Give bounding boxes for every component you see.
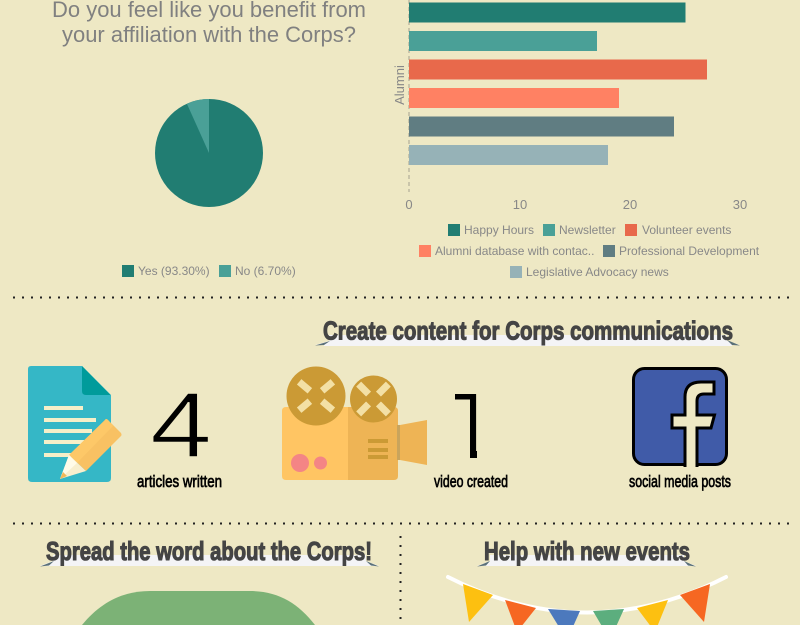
- y axis label: Alumni: [392, 65, 407, 105]
- bar legend: Legislative Advocacy news: [526, 265, 669, 279]
- bar legend: Happy Hours: [464, 223, 534, 237]
- bar legend: Volunteer events: [642, 223, 731, 237]
- green rounded shape: [82, 591, 315, 625]
- bar: Happy Hours: [409, 2, 686, 22]
- x axis ticks: 0: [405, 197, 413, 212]
- caption: video created: video created: [434, 472, 508, 491]
- heading: spread the word: Spread the word about the Corps!: [46, 536, 372, 566]
- pie legend: Yes (93.30%): [138, 264, 210, 278]
- bar legend: [419, 223, 760, 279]
- icon: film projector: [282, 366, 427, 480]
- x axis ticks: 20: [623, 197, 637, 212]
- bar: Newsletter: [409, 31, 597, 51]
- bar legend: Alumni database with contac..: [435, 244, 594, 258]
- heading: help with new events: Help with new events: [484, 536, 690, 566]
- x axis ticks: 10: [513, 197, 527, 212]
- pie legend: [122, 264, 296, 278]
- pie chart title: [52, 0, 366, 47]
- x axis ticks: [405, 197, 747, 212]
- bunting banner: [448, 577, 726, 625]
- pie legend: No (6.70%): [235, 264, 296, 278]
- pie chart: [155, 99, 263, 207]
- icon: document with pencil: [28, 366, 122, 482]
- number: 1: [455, 394, 477, 458]
- icon: facebook logo: [634, 368, 726, 467]
- pie chart title: your affiliation with the Corps?: [62, 22, 356, 47]
- number: 1: 1: [444, 374, 496, 478]
- x axis ticks: 30: [733, 197, 747, 212]
- bar: Alumni database: [409, 88, 619, 108]
- bar chart: [392, 0, 747, 212]
- caption: articles written: articles written: [137, 472, 222, 491]
- bar: Volunteer events: [409, 60, 707, 80]
- bar: Professional Development: [409, 116, 674, 136]
- number: 4: 4: [150, 373, 212, 477]
- caption: social media posts: social media posts: [629, 472, 731, 491]
- bar legend: Newsletter: [559, 223, 616, 237]
- bar legend: Professional Development: [619, 244, 760, 258]
- bar: Legislative Advocacy news: [409, 145, 608, 165]
